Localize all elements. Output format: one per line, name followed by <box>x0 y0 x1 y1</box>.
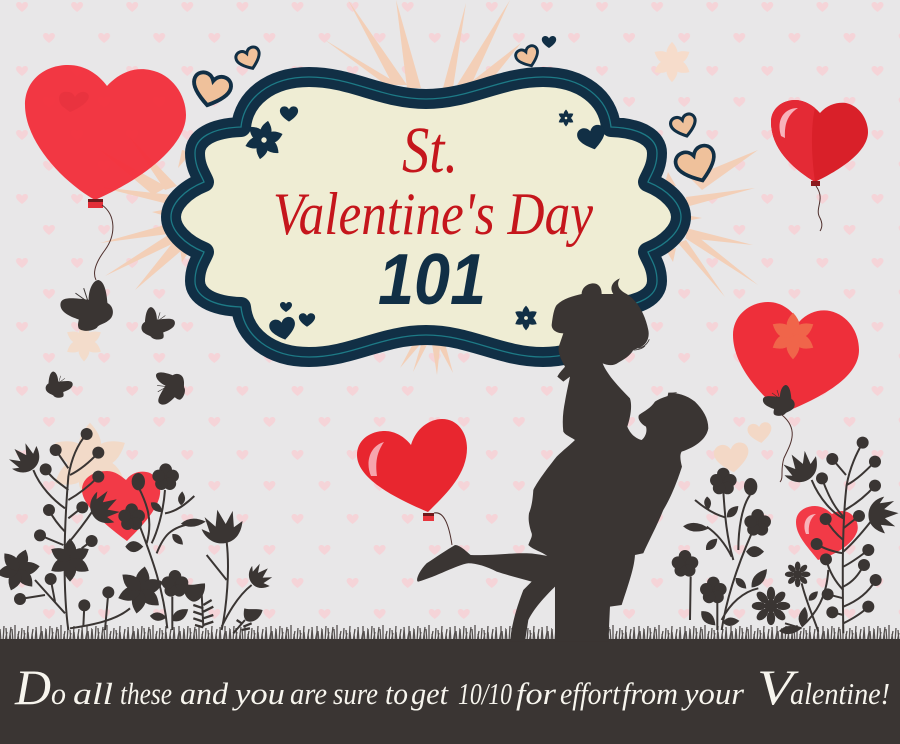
balloon: left meadow <box>82 471 160 541</box>
bottom tagline: D <box>14 659 51 715</box>
outlined heart 2 <box>234 45 264 73</box>
bottom tagline: you <box>232 676 285 711</box>
banner heart top right <box>576 123 608 153</box>
title: Valentine's Day: Valentine's Day <box>273 181 593 247</box>
right plant round flowers <box>672 468 771 603</box>
butterfly large <box>60 280 113 331</box>
right plant leaves <box>683 478 820 635</box>
bottom tagline: alentine! <box>790 676 890 711</box>
left plant ball heads <box>14 428 114 611</box>
bottom tagline: sure <box>333 676 378 711</box>
outlined heart 5 <box>673 143 721 187</box>
background heart pattern: right <box>450 0 900 640</box>
title: 101: 101 <box>378 240 486 320</box>
bottom tagline: to <box>385 676 408 711</box>
bottom tagline: effort <box>560 676 621 711</box>
bottom tagline: V <box>757 659 799 715</box>
bottom tagline: o <box>51 676 66 711</box>
faded peach heart small <box>747 421 773 445</box>
balloon: right meadow <box>796 506 858 560</box>
butterfly 4 <box>146 365 191 412</box>
bottom tagline: are <box>290 676 327 711</box>
couple silhouette <box>417 278 708 642</box>
banner flower top right <box>557 110 575 126</box>
banner heart bottom small <box>280 302 292 312</box>
title: St.: St. <box>402 114 458 187</box>
faded peach flower top right <box>652 42 692 82</box>
left plant round flowers <box>118 463 188 597</box>
flower on balloon <box>769 313 817 359</box>
right plant spiky flowers <box>777 445 899 533</box>
balloon: large left <box>25 65 186 280</box>
faded peach flower left meadow <box>50 423 130 503</box>
bottom tagline: your <box>681 676 745 711</box>
balloon: right center with flower <box>733 302 859 482</box>
bottom tagline: get <box>411 676 449 711</box>
bottom band <box>0 639 900 744</box>
banner heart bottom middle <box>299 313 315 327</box>
hair wisps <box>633 339 677 393</box>
right meadow plants <box>672 437 899 635</box>
background heart pattern: left <box>0 0 450 640</box>
left plant star flowers <box>0 538 169 618</box>
grass strip <box>0 624 900 642</box>
faded peach heart large <box>713 441 751 475</box>
balloon: top right <box>771 100 868 231</box>
right plant daisies <box>752 562 810 625</box>
outlined heart 4 <box>669 113 699 139</box>
left plant tulips and ferns <box>184 583 263 630</box>
butterfly on balloon <box>763 385 795 416</box>
bottom tagline: and <box>180 676 229 711</box>
sunburst rays <box>97 0 758 375</box>
bottom tagline: these <box>120 676 172 711</box>
bottom tagline: 10/10 <box>458 676 512 711</box>
butterfly 2 <box>141 307 175 340</box>
banner flower top left <box>241 117 287 163</box>
right plant ball heads <box>811 437 882 618</box>
solid navy heart <box>542 36 556 48</box>
bottom tagline <box>14 659 890 715</box>
left meadow plants <box>0 428 277 633</box>
banner flower bottom right <box>514 306 538 330</box>
butterfly 3 <box>46 372 73 398</box>
left plant spiky flowers <box>3 437 277 594</box>
balloon: center <box>357 419 467 545</box>
bottom tagline: all <box>73 676 113 711</box>
bottom tagline: from <box>622 676 678 711</box>
banner heart top left <box>280 106 298 122</box>
outlined heart 1 <box>189 70 233 110</box>
left plant leaves <box>125 473 206 625</box>
bottom tagline: for <box>516 676 557 711</box>
banner: title cartouche <box>171 77 681 357</box>
outlined heart 3 <box>514 44 542 70</box>
faded peach flower under butterfly <box>64 322 104 362</box>
banner heart bottom large <box>268 316 298 342</box>
